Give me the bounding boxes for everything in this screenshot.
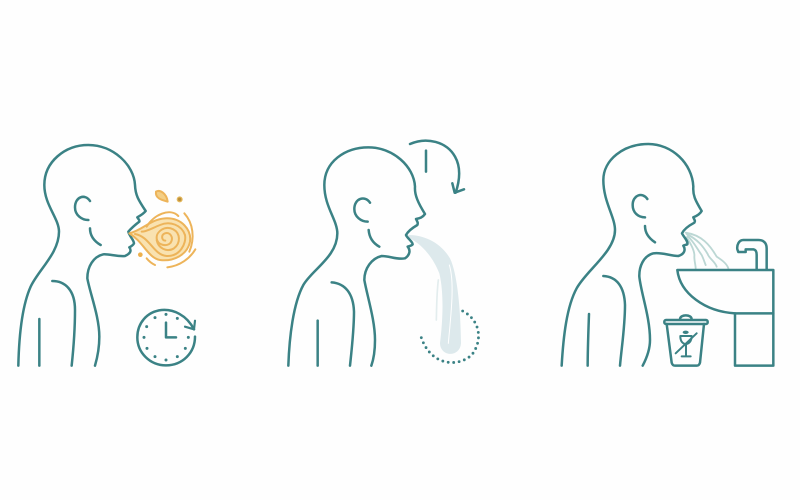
icon: trash bin with crossed-out glass [664, 315, 708, 366]
icon: clock with arrow [137, 310, 195, 365]
icon: dotted arc [421, 311, 479, 363]
arrow: curved tilt [410, 141, 464, 193]
panel: head tilted and spitting [288, 141, 479, 366]
icon: sink with faucet [677, 240, 773, 366]
person profile 3 [562, 144, 702, 366]
panel: spitting into sink [562, 144, 773, 366]
icon: swirling liquid in mouth [129, 191, 195, 267]
liquid stream [408, 235, 461, 354]
person profile 1 [18, 145, 146, 366]
panel: swishing with timer [18, 145, 195, 366]
water streams [686, 233, 728, 268]
person profile 2 [288, 147, 425, 366]
